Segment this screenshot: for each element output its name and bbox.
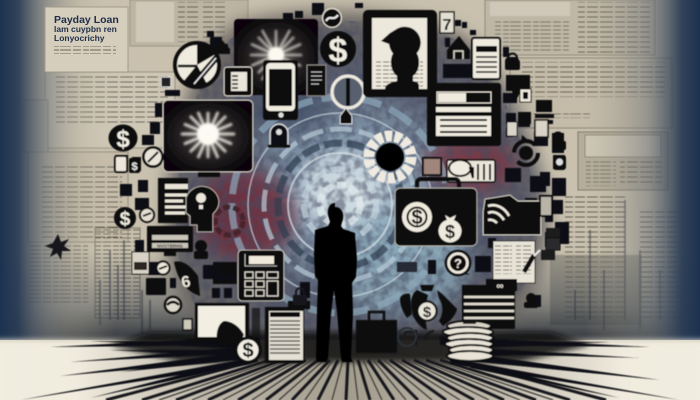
- icon: lock beside figure: [293, 288, 307, 305]
- icon: dollar circle lower left: $: [120, 209, 131, 230]
- icon: speech bubble with lock: [506, 75, 531, 102]
- icon: tile beside wallet: [546, 228, 560, 238]
- icon: percent badge: [144, 148, 162, 166]
- icon: picture frame: [423, 158, 441, 175]
- icon: card small: [183, 319, 192, 330]
- icon: dollar circle top: $: [329, 32, 348, 70]
- icon: form page: [472, 38, 500, 79]
- collage icons: [108, 3, 569, 363]
- icon: open document: [493, 241, 540, 283]
- icon: laptop: [186, 303, 249, 346]
- icon: padlock small: [505, 54, 520, 70]
- icon: dollar circle left: [108, 124, 138, 153]
- subtitle second line: Lonyocrichy: [54, 33, 105, 43]
- icon: badge lower: [156, 262, 170, 274]
- caption on monitor: NVOTBRHG: [157, 244, 183, 248]
- icon: printer / card reader: [462, 279, 517, 329]
- icon: hands with money bag: $: [423, 304, 432, 321]
- panel: briefcase with dollars: $: [445, 222, 455, 242]
- icon: tag with dollar: $: [131, 161, 138, 173]
- icon: eye with circular arrows: [514, 135, 538, 165]
- icon: stacked card: [132, 252, 149, 274]
- icon: document left: [158, 178, 188, 223]
- icon: small id tile: [507, 112, 531, 136]
- icon: round badge right: [553, 155, 566, 170]
- icon: person lower right: [524, 293, 538, 308]
- scattered small icons: [115, 3, 569, 346]
- icon: document with lines: [265, 301, 310, 363]
- icon: round arrow badge: [165, 297, 181, 313]
- figure: silhouette of man: [314, 203, 357, 362]
- floor with streaks: [0, 332, 700, 400]
- circuit rings: [215, 97, 448, 313]
- title: Payday Loan: [54, 14, 119, 26]
- panel: briefcase with dollars: $: [411, 207, 423, 229]
- panel: article title: [45, 7, 128, 72]
- icon: monitor right: [535, 100, 554, 118]
- icon: tag with dollar: [129, 158, 140, 173]
- subtitle: lam cuypbn ren: [54, 24, 117, 34]
- icon: number tile right: [535, 120, 548, 137]
- icon: desk monitor: [213, 262, 237, 284]
- icon: pie chart: [175, 43, 219, 87]
- icon: dollar circle lower left: [114, 207, 136, 230]
- icon: padlock under phone: [268, 124, 290, 146]
- icon: head with question: [186, 186, 219, 232]
- icon: ring with lock: [332, 76, 364, 124]
- icon: monitor with banner: [147, 226, 193, 256]
- panel: briefcase with dollars: [395, 179, 477, 246]
- icon: note card: [224, 67, 252, 96]
- icon: document dark: [307, 65, 326, 96]
- icon: tile above wallet: [540, 196, 552, 216]
- panel: speech with chart: [447, 160, 495, 182]
- icon: coin stack: [443, 321, 493, 361]
- icon: dollar circle left: $: [116, 126, 130, 153]
- icon: faded ring: [398, 328, 416, 346]
- icon: dollar coin: $: [242, 340, 254, 362]
- icon: dark square: [146, 278, 166, 295]
- icon: hands with money bag: [400, 285, 457, 345]
- icon: dollar coin: [236, 338, 260, 362]
- icon: question bubble: ?: [454, 256, 462, 271]
- icon: smartphone: [263, 60, 298, 120]
- icon: small circle top: [322, 8, 342, 28]
- panel: starburst top: [234, 19, 318, 95]
- panel: form on dark card: [427, 83, 501, 146]
- icon: tablet small: [115, 156, 127, 172]
- icon: house: [447, 36, 470, 59]
- icon: pie tile small: [541, 238, 560, 260]
- icon: calculator: [238, 250, 284, 301]
- icon: person small: [194, 240, 208, 259]
- panel: portrait frame: [363, 10, 437, 97]
- icon: dollar circle top: [320, 31, 356, 70]
- icon: black starburst mark: [45, 234, 71, 260]
- icon: number tile: 7: [443, 17, 452, 34]
- icon: black briefcase: [356, 312, 397, 353]
- icon: small house: [214, 40, 230, 54]
- icon: gear sun: [369, 136, 411, 178]
- icon: number tile: [440, 12, 454, 34]
- icon: badge circle: [140, 208, 154, 222]
- icon: shield: 6: [180, 273, 192, 292]
- icon: printer / card reader: ∞: [496, 281, 504, 292]
- icon: question bubble: [446, 251, 470, 275]
- icon: person right: [552, 132, 566, 150]
- icon: shield: [174, 262, 200, 296]
- stand under large panel: [198, 172, 220, 177]
- panel: starburst large: [163, 100, 253, 172]
- icon: wallet: [483, 195, 541, 235]
- mosaic background: [166, 11, 547, 341]
